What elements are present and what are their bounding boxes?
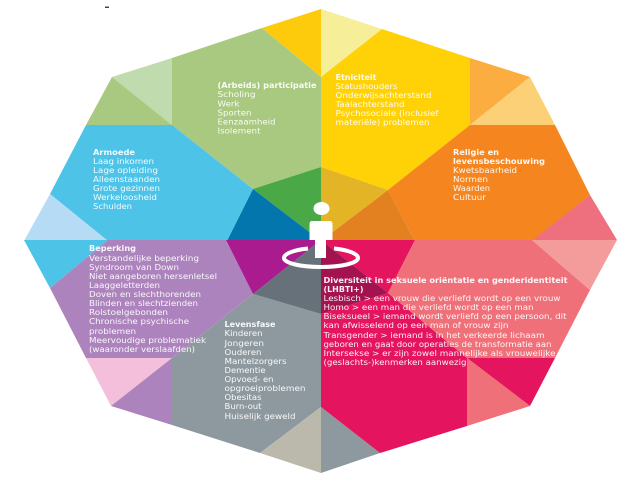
stray mark [105,6,109,8]
text: religie en levensbeschouwing [453,148,545,202]
icon: person on ring [284,202,358,267]
text: etniciteit [334,73,439,127]
text: diversiteit in seksuele orientatie en genderidentiteit: Transgender > iemand is in het verkeerde lichaam [322,331,545,340]
text: beperking: Meervoudige problematiek [89,336,206,345]
text: beperking: (waaronder verslaafden) [89,345,195,354]
text: religie en levensbeschouwing: Waarden [453,184,490,193]
text: armoede: Grote gezinnen [93,184,160,193]
text: arbeidsparticipatie: Sporten [218,108,252,118]
text: religie en levensbeschouwing: Cultuur [453,193,487,202]
text: diversiteit in seksuele orientatie en genderidentiteit: Intersekse > er zijn zowel mannelijke als vrouwelijke [324,349,556,358]
text: armoede: Laag inkomen [93,157,154,166]
text: armoede: Alleenstaanden [93,175,160,184]
text: religie en levensbeschouwing: levensbeschouwing [453,157,545,166]
text: religie en levensbeschouwing: Religie en [453,148,499,157]
text: beperking: Syndroom van Down [89,263,179,272]
text: armoede: Lage opleiding [93,166,158,175]
text: arbeidsparticipatie: (Arbeids) participatie [218,81,317,90]
text: levensfase: opgroeiproblemen [224,384,306,393]
text: beperking: Verstandelijke beperking [89,254,199,263]
text: etniciteit: Etniciteit [336,73,377,82]
text: arbeidsparticipatie: Isolement [218,126,260,136]
text: arbeidsparticipatie: Eenzaamheid [218,118,276,126]
text: armoede: Schulden [93,202,132,211]
text: diversiteit in seksuele orientatie en genderidentiteit: Homo > een man die verliefd wordt op een man [324,303,534,312]
text: etniciteit: Onderwijsachterstand [336,91,432,100]
text: etniciteit: Psychosociale (inclusief [336,109,439,118]
text: diversiteit in seksuele orientatie en genderidentiteit: Biseksueel > iemand wordt verliefd op een persoon, dit [324,312,566,321]
text: diversiteit in seksuele orientatie en genderidentiteit [322,276,568,367]
text: levensfase: Kinderen [224,329,262,338]
text: beperking: problemen [89,327,136,336]
text: armoede: Werkeloosheid [93,193,157,202]
text: diversiteit in seksuele orientatie en genderidentiteit: geboren en gaat door operaties de transformatie aan [324,340,552,349]
text: beperking: Chronische psychische [89,317,189,326]
text: religie en levensbeschouwing: Normen [453,175,488,184]
panel: diversiteit in seksuele orientatie [321,195,617,473]
text: diversiteit in seksuele orientatie en genderidentiteit: kan afwisselend op een man of vrouw zijn [324,321,508,330]
text: levensfase: Obesitas [224,393,262,402]
panel: religie [321,58,590,241]
text: levensfase: Opvoed- en [224,375,274,384]
text: beperking: Beperking [89,244,136,253]
text: levensfase: Ouderen [224,348,262,357]
text: beperking: Doven en slechthorenden [89,290,201,299]
text: etniciteit: Statushouders [336,82,398,91]
text: diversiteit in seksuele orientatie en genderidentiteit: (LHBTI+) [324,285,364,294]
text: arbeidsparticipatie: Werk [218,100,240,108]
text: armoede [93,148,160,211]
text: levensfase: Huiselijk geweld [224,412,296,421]
text: levensfase: Dementie [224,366,266,375]
text: diversiteit in seksuele orientatie en genderidentiteit: (geslachts-)kenmerken aanwezig [324,358,466,367]
text: levensfase: Mantelzorgers [224,357,286,366]
text: levensfase: Burn-out [224,402,262,411]
text: beperking: Niet aangeboren hersenletsel [89,272,217,281]
text: beperking [89,244,217,354]
text: diversiteit in seksuele orientatie en genderidentiteit: Diversiteit in seksuele oriëntatie en genderidentiteit [324,276,568,285]
text: beperking: Blinden en slechtzienden [89,299,198,308]
panel: levensfase [172,240,321,473]
text: armoede: Armoede [93,148,136,157]
panel: beperking [24,240,321,425]
text: levensfase [223,320,306,421]
text: levensfase: Levensfase [224,320,276,329]
text: beperking: Laaggeletterden [89,281,160,290]
panel: etniciteit [321,9,470,241]
text: arbeidsparticipatie [218,81,317,136]
text: diversiteit in seksuele orientatie en genderidentiteit: Lesbisch > een vrouw die verliefd wordt op een vrouw [324,294,561,303]
panel: armoede [24,125,321,241]
text: religie en levensbeschouwing: Kwetsbaarheid [453,166,517,175]
text: etniciteit: materiële) problemen [336,118,430,127]
panel: arbeidsparticipatie [86,9,321,241]
text: arbeidsparticipatie: Scholing [218,90,256,99]
text: beperking: Rolstoelgebonden [89,308,168,317]
text: etniciteit: Taalachterstand [334,100,404,109]
text: levensfase: Jongeren [223,339,264,348]
